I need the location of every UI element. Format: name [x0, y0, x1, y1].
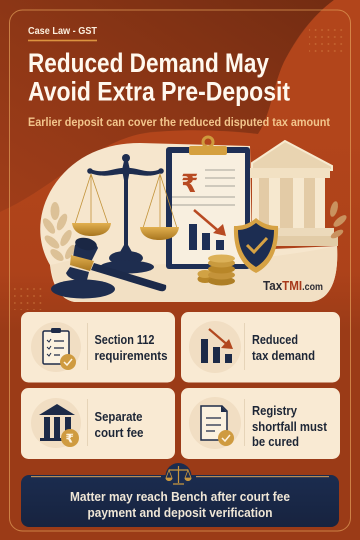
icon: small scales	[166, 463, 192, 489]
subtitle: Earlier deposit can cover the reduced disputed tax amount	[28, 115, 330, 129]
label: Section 112	[94, 332, 154, 347]
banner text: Matter may reach Bench after court fee	[70, 489, 290, 504]
card: Registry shortfall must be cured	[181, 388, 340, 459]
title	[28, 48, 290, 106]
icon: falling bars	[201, 329, 233, 363]
icon: shield with check	[234, 218, 278, 273]
building	[246, 141, 338, 246]
banner text: payment and deposit verification	[88, 505, 273, 520]
dot pattern top right	[309, 26, 344, 56]
label: Reduced	[252, 332, 298, 347]
icon: checklist	[43, 328, 76, 370]
logo: TaxTMI.com: TaxTMI.com	[263, 278, 323, 293]
title: Reduced Demand May	[28, 48, 269, 78]
label: be cured	[252, 434, 299, 449]
hero cream backdrop	[40, 143, 337, 302]
right leaves	[329, 200, 348, 240]
ground	[50, 246, 337, 302]
label: tax demand	[252, 348, 315, 363]
card: Section 112 requirements	[21, 312, 175, 382]
label: requirements	[94, 348, 168, 363]
dot pattern lower left	[14, 286, 43, 310]
badge: Case Law - GST	[28, 25, 98, 41]
badge: Case Law - GST: Case Law - GST	[28, 25, 98, 37]
icon: court with rupee: ₹	[66, 432, 74, 446]
card: Separate court fee	[21, 388, 175, 459]
label: Registry	[252, 403, 298, 418]
hero illustration panel	[40, 137, 348, 302]
card: Reduced tax demand	[181, 312, 340, 382]
banner: conclusion	[21, 463, 339, 527]
icon: clipboard with rupee	[166, 137, 250, 269]
icon: coin stacks	[198, 254, 235, 286]
label: Separate	[94, 409, 142, 424]
label: court fee	[94, 425, 144, 440]
icon: clipboard with rupee: ₹	[181, 169, 198, 198]
left wheat leaves	[41, 202, 77, 263]
label: shortfall must	[252, 419, 328, 434]
title: Avoid Extra Pre-Deposit	[28, 76, 290, 106]
icon: court with rupee	[39, 404, 79, 447]
icon: scales of justice	[72, 154, 179, 274]
icon: gavel	[51, 236, 166, 298]
icon: document with check	[201, 406, 234, 446]
